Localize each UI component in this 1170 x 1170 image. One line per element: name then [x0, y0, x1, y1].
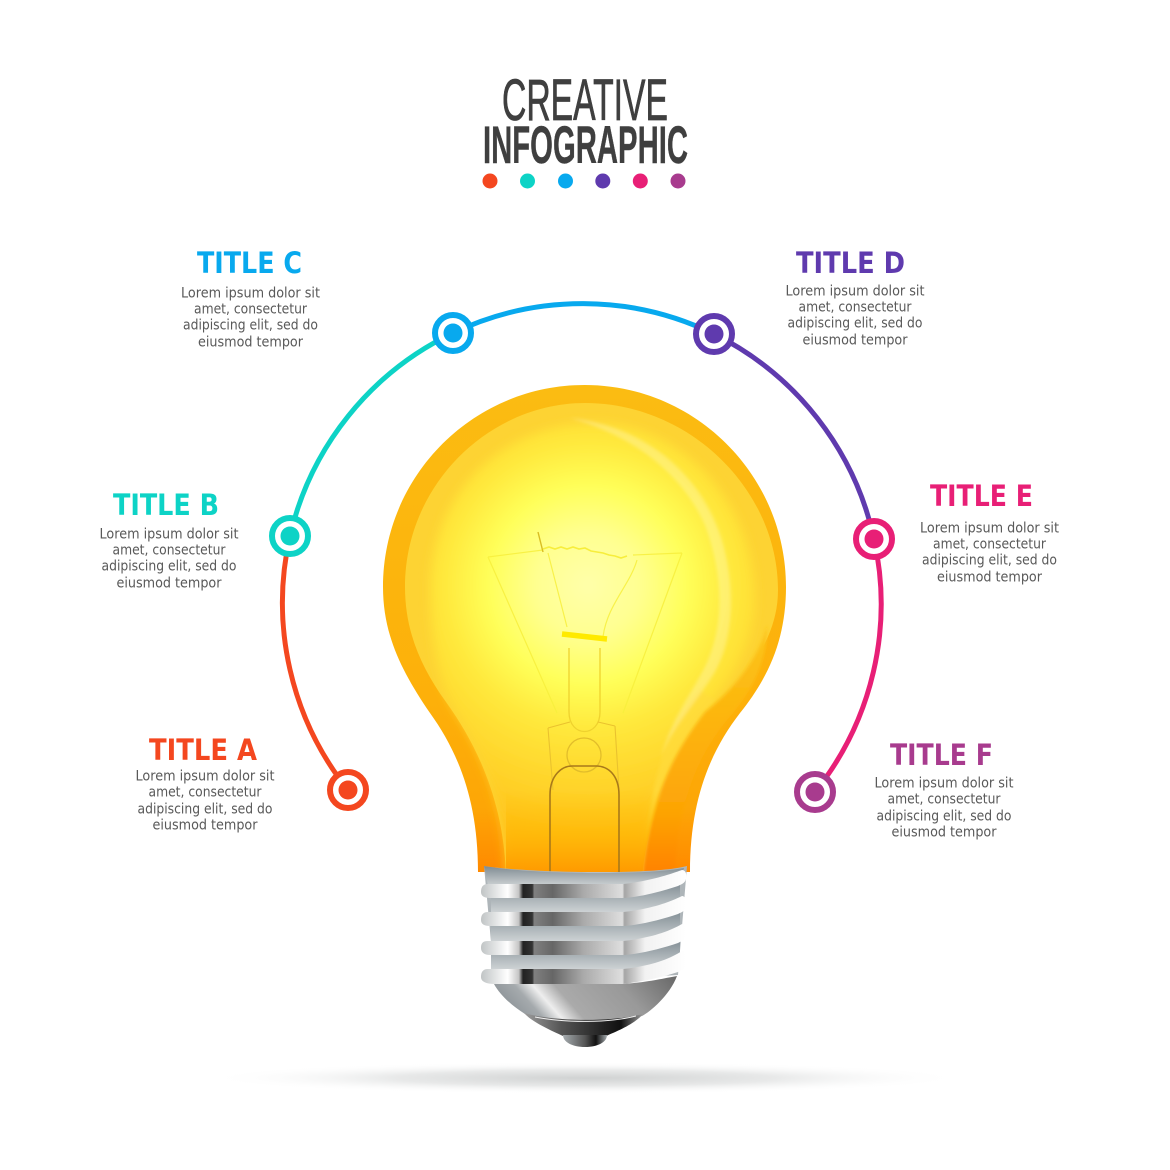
title: INFOGRAPHIC: [483, 116, 688, 175]
text block: Title F: Lorem ipsum dolor sit: [874, 775, 1014, 791]
text block: Title E: TITLE E: [930, 479, 1033, 513]
text block: Title B: Lorem ipsum dolor sit: [100, 526, 239, 542]
text block: Title C: [181, 246, 321, 350]
node B: [272, 518, 308, 554]
text block: Title B: eiusmod tempor: [116, 575, 222, 591]
title: CREATIVE: [502, 68, 668, 133]
text block: Title C: eiusmod tempor: [198, 334, 303, 350]
text block: Title F: amet, consectetur: [888, 791, 1001, 807]
text block: Title C: adipiscing elit, sed do: [183, 317, 318, 333]
text block: Title F: adipiscing elit, sed do: [876, 808, 1012, 824]
text block: Title B: amet, consectetur: [112, 542, 226, 558]
ground shadow: [205, 1062, 965, 1094]
text block: Title E: eiusmod tempor: [937, 569, 1042, 585]
node E: [856, 521, 892, 557]
text block: Title C: TITLE C: [197, 246, 302, 280]
light bulb: [383, 385, 786, 1047]
text block: Title B: adipiscing elit, sed do: [102, 558, 236, 574]
text block: Title F: [874, 738, 1014, 840]
text block: Title F: TITLE F: [890, 738, 993, 772]
text block: Title D: eiusmod tempor: [802, 332, 908, 348]
text block: Title A: [136, 733, 275, 833]
arc connector: [282, 304, 881, 792]
text block: Title F: eiusmod tempor: [892, 824, 997, 840]
text block: Title D: [786, 246, 925, 348]
metal screw base: [481, 866, 687, 1047]
text block: Title C: Lorem ipsum dolor sit: [181, 285, 321, 301]
title: [483, 68, 688, 175]
text block: Title E: amet, consectetur: [933, 536, 1046, 552]
node C: [435, 315, 471, 351]
text block: Title A: adipiscing elit, sed do: [138, 801, 272, 817]
node F: [797, 774, 833, 810]
node A: [330, 772, 366, 808]
text block: Title E: Lorem ipsum dolor sit: [920, 520, 1060, 536]
text block: Title D: adipiscing elit, sed do: [788, 315, 922, 331]
text block: Title E: adipiscing elit, sed do: [922, 552, 1057, 568]
text block: Title A: eiusmod tempor: [152, 817, 258, 833]
text block: Title A: Lorem ipsum dolor sit: [136, 768, 275, 784]
filament and supports: [488, 532, 682, 873]
text block: Title A: TITLE A: [149, 733, 257, 767]
text block: Title C: amet, consectetur: [194, 301, 307, 317]
text block: Title B: [100, 488, 239, 591]
text block: Title D: amet, consectetur: [798, 299, 912, 315]
colored dots: [482, 174, 686, 188]
text block: Title D: TITLE D: [796, 246, 905, 280]
text block: Title B: TITLE B: [113, 488, 219, 522]
text block: Title A: amet, consectetur: [148, 784, 262, 800]
text block: Title D: Lorem ipsum dolor sit: [786, 283, 925, 299]
node D: [696, 316, 732, 352]
text block: Title E: [920, 479, 1060, 585]
bulb glass: [383, 385, 786, 880]
